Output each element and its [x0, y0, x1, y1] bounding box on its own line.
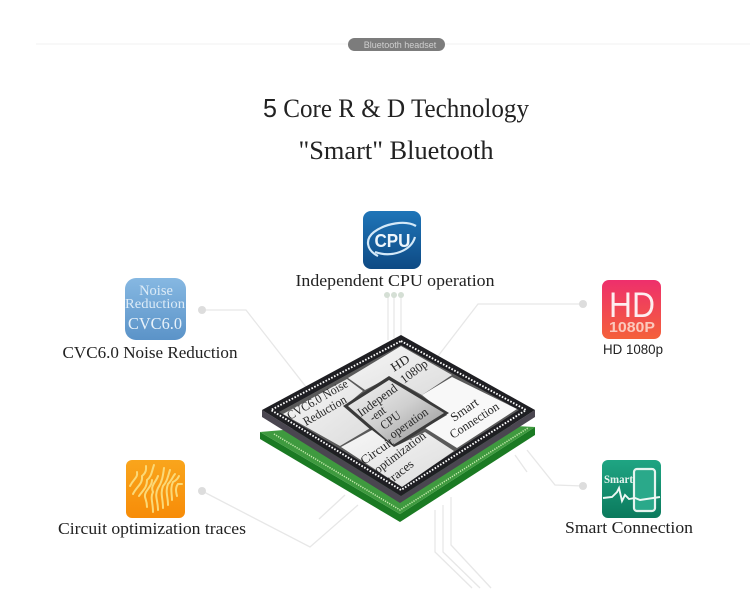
icon: Noise Reduction CVC6.0: CVC6.0 — [128, 314, 182, 333]
tile: Smart Connection — [422, 377, 517, 448]
header divider line — [36, 43, 750, 45]
tile: Independent CPU operation: CPU — [378, 408, 404, 432]
badge: Bluetooth headset — [348, 38, 445, 51]
tile: Circuit optimization traces — [341, 428, 454, 487]
tile: CVC6.0 Noise Reduction — [283, 376, 372, 446]
tile: Circuit optimization traces: Circuit — [358, 434, 396, 467]
icon: Noise Reduction CVC6.0: Reduction — [125, 297, 185, 312]
badge: Bluetooth headset: Bluetooth headset — [364, 40, 437, 50]
title: "Smart" Bluetooth — [298, 136, 494, 165]
title — [263, 93, 529, 165]
icon: HD 1080P: 1080P — [609, 320, 655, 336]
icon: Noise Reduction CVC6.0: Noise — [139, 283, 173, 299]
label: Independent CPU operation: Independent CPU operation — [296, 271, 495, 290]
tile: HD 1080p: HD — [388, 352, 412, 375]
tile: Independent CPU operation: -ent — [367, 403, 389, 424]
tile: Independent CPU operation: Independ — [355, 381, 401, 419]
icon: CPU — [363, 211, 421, 269]
icon: Smart phone pulse: Smart — [604, 474, 633, 486]
tile: Independent CPU operation: operation — [387, 404, 431, 441]
label: CVC6.0 Noise Reduction: CVC6.0 Noise Reduction — [62, 343, 238, 362]
icon: HD 1080P: HD — [609, 286, 655, 325]
connector lines — [198, 292, 587, 588]
tile: CVC6.0 Noise Reduction: Reduction — [300, 392, 350, 429]
tile: Smart Connection: Smart — [448, 395, 482, 424]
tile: Circuit optimization traces: optimization — [371, 428, 429, 476]
icon: Circuit traces — [126, 460, 185, 518]
tile: HD 1080p: 1080p — [397, 357, 431, 386]
tile: Independent CPU operation — [343, 376, 449, 449]
label: Circuit optimization traces: Circuit optimization traces — [58, 519, 246, 538]
green board — [260, 420, 535, 522]
dark substrate — [262, 335, 535, 503]
tile: Smart Connection: Connection — [447, 399, 502, 442]
tile: CVC6.0 Noise Reduction: CVC6.0 Noise — [284, 376, 351, 423]
icon: Noise Reduction CVC6.0 — [125, 278, 186, 340]
title: 5 Core R & D Technology — [263, 93, 529, 123]
tile: HD 1080p — [348, 346, 452, 395]
icon: Smart phone pulse — [602, 460, 661, 518]
tile: Circuit optimization traces: traces — [384, 457, 417, 486]
label: Smart Connection: Smart Connection — [565, 518, 693, 537]
chip — [260, 335, 535, 522]
label: HD 1080p: HD 1080p — [603, 341, 663, 357]
icon: HD 1080P — [602, 280, 661, 339]
icon: CPU: CPU — [374, 231, 410, 251]
